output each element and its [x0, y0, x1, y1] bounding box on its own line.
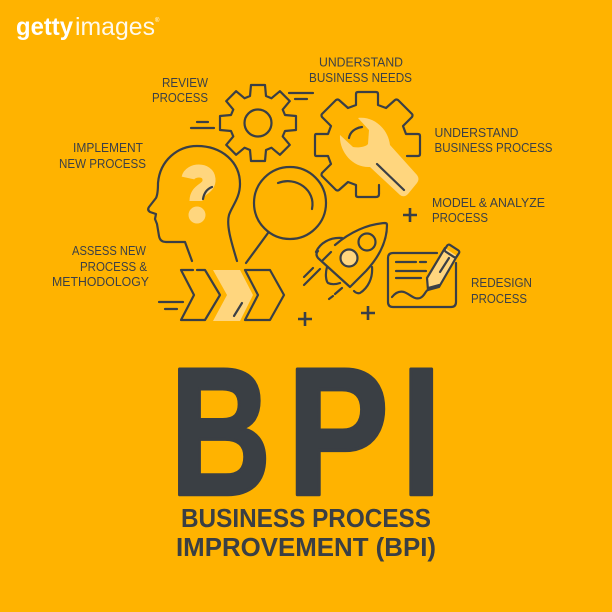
icon: small gear — [220, 85, 296, 161]
label: review process — [152, 76, 208, 105]
subtitle: business process improvement (BPI) — [176, 505, 436, 562]
subtitle: business process improvement (BPI): BUSINESS PROCESS — [181, 505, 431, 533]
logo: gettyimages watermark: images — [75, 13, 155, 41]
chevron: left — [181, 270, 220, 320]
notepad text lines — [396, 262, 426, 278]
label: model and analyze process — [432, 196, 545, 225]
subtitle: business process improvement (BPI): IMPROVEMENT (BPI) — [176, 534, 436, 562]
pencil outline — [427, 248, 457, 290]
chevron: middle highlighted — [213, 270, 253, 321]
icon: rocket — [304, 223, 387, 299]
notepad outline — [388, 253, 456, 307]
rocket window top — [358, 234, 376, 250]
label: understand business process — [434, 126, 552, 155]
title: BPI — [170, 330, 441, 534]
accent lines: small gear left — [191, 122, 214, 128]
label: understand business process: BUSINESS PROCESS — [434, 141, 552, 155]
icon: plus lower left — [298, 312, 312, 326]
label: understand business process: UNDERSTAND — [434, 126, 518, 140]
rocket body — [316, 223, 387, 287]
label: understand business needs: UNDERSTAND — [319, 56, 403, 70]
title: BPI: I — [401, 330, 441, 533]
label: implement new process: IMPLEMENT — [73, 141, 143, 155]
label: redesign process: PROCESS — [471, 292, 527, 306]
label: implement new process — [59, 141, 146, 171]
wrench — [340, 118, 418, 196]
label: assess new process and methodology: METHODOLOGY — [52, 275, 150, 289]
label: redesign process — [471, 276, 532, 306]
icon: three chevrons — [181, 270, 284, 321]
icon: notepad with pencil — [388, 244, 460, 307]
icon: magnifying glass — [246, 167, 326, 263]
chevron accent — [234, 303, 242, 316]
question mark — [188, 171, 209, 224]
accent lines: chevrons left — [159, 302, 183, 309]
title: BPI: P — [287, 330, 389, 533]
logo: gettyimages watermark: getty — [16, 13, 73, 41]
label: review process: REVIEW — [162, 76, 208, 90]
question mark accent — [203, 187, 212, 199]
label: model and analyze process: MODEL & ANALYZE — [432, 196, 545, 210]
label: understand business needs: BUSINESS NEEDS — [309, 71, 412, 85]
pencil body — [427, 248, 457, 290]
label: assess new process and methodology: ASSESS NEW — [72, 244, 146, 258]
rocket fins — [316, 238, 372, 293]
title: BPI: B — [170, 331, 271, 534]
icon: plus lower middle — [361, 306, 375, 320]
notepad signature — [392, 290, 428, 298]
large gear outline — [315, 92, 420, 197]
label: model and analyze process: PROCESS — [432, 211, 488, 225]
logo: gettyimages watermark: ® — [155, 17, 160, 24]
label: assess new process and methodology: PROCESS & — [80, 260, 148, 274]
rocket exhaust — [304, 268, 342, 299]
logo: gettyimages watermark — [16, 13, 160, 41]
rocket window light — [340, 250, 358, 266]
head outline — [148, 146, 240, 261]
pencil eraser — [444, 244, 460, 258]
icon: large gear with wrench — [315, 92, 420, 197]
label: implement new process: NEW PROCESS — [59, 157, 146, 171]
label: understand business needs — [309, 56, 412, 85]
icon: plus right of gear — [403, 208, 417, 222]
label: assess new process and methodology — [52, 244, 150, 289]
wrench details — [349, 127, 404, 190]
label: redesign process: REDESIGN — [471, 276, 532, 290]
label: review process: PROCESS — [152, 91, 208, 105]
accent lines: small gear right — [289, 93, 313, 99]
chevron: right — [245, 270, 284, 320]
icon: head with question mark — [148, 146, 240, 261]
pencil accent — [440, 258, 449, 272]
